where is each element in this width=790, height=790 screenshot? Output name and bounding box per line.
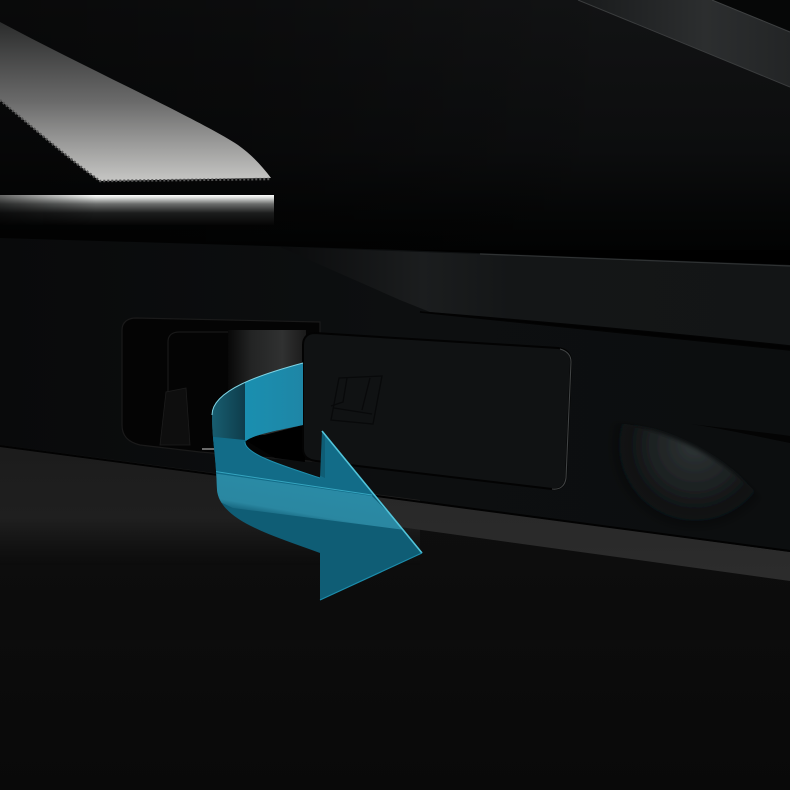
- grey fabric band and lower carpet: [0, 445, 790, 790]
- cylinder mechanism: [228, 330, 306, 435]
- rear bright band: [245, 364, 303, 442]
- storage recess with latch: [122, 318, 320, 462]
- front band: [213, 436, 374, 496]
- rear side window: [0, 22, 271, 181]
- light reflection band: [216, 474, 402, 530]
- upper right trim strip: [578, 0, 790, 87]
- shadow behind arrow: [245, 425, 305, 462]
- upper wall panel: [0, 0, 790, 250]
- middle door panel: [0, 238, 790, 552]
- upper lit band: [280, 247, 790, 346]
- icon: seat symbol: [331, 376, 382, 424]
- small glint: [202, 448, 226, 450]
- light strip under window: [0, 195, 274, 225]
- thin crease line: [205, 470, 372, 495]
- left curve band: [212, 383, 245, 445]
- curved sheen: [605, 421, 790, 552]
- seat release cover flap: [303, 333, 571, 489]
- curved blue arrow: [212, 364, 421, 600]
- arrow edge highlights: [212, 363, 422, 600]
- inner latch outline: [168, 332, 228, 392]
- latch hook: [160, 388, 190, 445]
